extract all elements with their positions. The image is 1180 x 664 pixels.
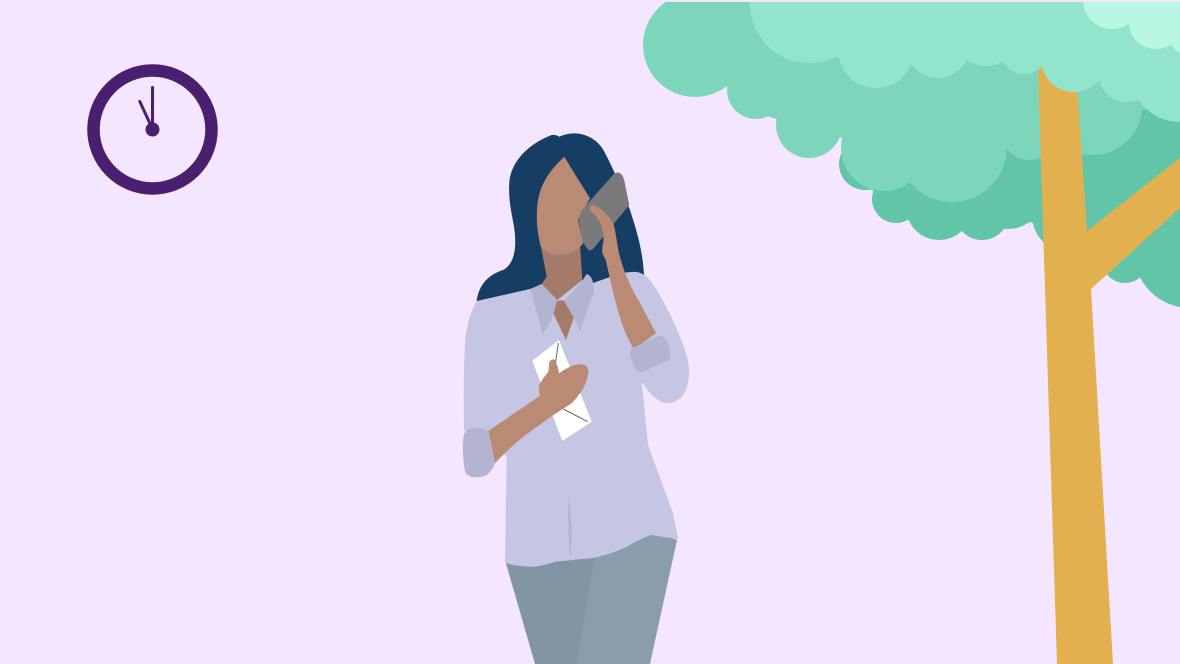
right shirt cuff: [630, 336, 670, 372]
collar right: [564, 274, 594, 331]
collar left: [530, 284, 557, 334]
tree foliage: light layer: [749, 0, 1180, 122]
phone: [579, 172, 629, 250]
shirt placket fold: [568, 497, 572, 562]
neck and chest: [541, 245, 582, 340]
envelope: [532, 340, 592, 441]
lower arm and hand: [488, 359, 588, 463]
tree foliage: middle layer: [643, 0, 1180, 202]
tree foliage: dark back layer: [839, 100, 1180, 308]
tree trunk and branch: [1038, 66, 1180, 664]
icon: clock: [94, 70, 212, 188]
hair: [477, 133, 644, 320]
tree foliage: lightest layer: [1083, 2, 1180, 53]
face: [537, 157, 590, 255]
left shirt cuff: [463, 428, 495, 477]
shirt: [464, 272, 689, 567]
tree: [643, 0, 1180, 664]
raised arm and hand: [590, 205, 656, 349]
trousers: [505, 530, 677, 664]
woman on the phone: [463, 133, 689, 664]
